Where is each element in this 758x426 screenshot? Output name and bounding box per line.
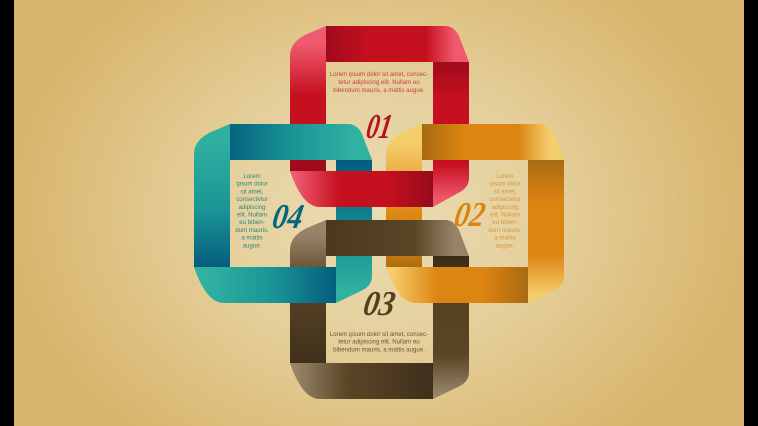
text block 01 bbox=[330, 71, 428, 94]
orange ring right column bbox=[528, 160, 564, 303]
teal ring bottom band bbox=[194, 267, 336, 303]
number 04: 04 bbox=[270, 197, 306, 236]
text block 02: dum mauris, bbox=[488, 227, 522, 234]
text block 01: tetur adipiscing elit. Nullam eu bbox=[338, 79, 420, 86]
text block 01: Lorem ipsum dolor sit amet, consec- bbox=[330, 71, 428, 78]
brown ring top band bbox=[326, 220, 469, 256]
number 03: 03 bbox=[361, 284, 398, 323]
text block 04: eu biben- bbox=[239, 219, 265, 226]
orange ring left column bbox=[386, 124, 422, 267]
text block 02: consectetur bbox=[489, 196, 521, 203]
number 01: 01 bbox=[364, 107, 395, 146]
brown ring bottom band bbox=[290, 363, 433, 399]
text block 03: bibendum mauris, a mattis augue. bbox=[333, 346, 425, 354]
text block 02: Lorem bbox=[496, 173, 514, 180]
number 02: 02 bbox=[452, 195, 488, 234]
text block 02: eu biben- bbox=[492, 219, 518, 226]
red ring left column bbox=[290, 26, 326, 171]
text block 02: adipiscing bbox=[491, 204, 519, 211]
orange ring bottom band bbox=[386, 267, 528, 303]
text block 03: tetur adipiscing elit. Nullam eu bbox=[338, 338, 420, 346]
orange ring top band bbox=[422, 124, 564, 160]
text block 03: Lorem ipsum dolor sit amet, consec- bbox=[330, 331, 428, 338]
brown ring left column bbox=[290, 220, 326, 363]
red ring bottom band bbox=[290, 171, 433, 207]
red ring top band bbox=[326, 26, 469, 62]
teal ring top band bbox=[230, 124, 372, 160]
brown ring right column bbox=[433, 256, 469, 399]
text block 01: bibendum mauris, a mattis augue. bbox=[333, 87, 425, 94]
text block 02: augue. bbox=[496, 242, 515, 249]
text block 04: ipsum dolor bbox=[236, 181, 268, 188]
text block 02: sit amet, bbox=[493, 188, 517, 195]
teal ring right column bbox=[336, 160, 372, 303]
red ring right column bbox=[433, 62, 469, 207]
text block 04 bbox=[235, 173, 269, 249]
text block 02 bbox=[488, 173, 522, 249]
text block 04: consectetur bbox=[236, 196, 268, 203]
text block 04: Lorem bbox=[243, 173, 261, 180]
text block 04: dum mauris, bbox=[235, 227, 269, 234]
text block 04: adipiscing bbox=[238, 204, 266, 211]
text block 02: a mattis bbox=[494, 235, 516, 242]
text block 04: a mattis bbox=[241, 235, 263, 242]
text block 04: sit amet, bbox=[240, 188, 264, 195]
text block 02: ipsum dolor bbox=[489, 181, 521, 188]
text block 04: elit. Nullam bbox=[237, 212, 267, 218]
teal ring left column bbox=[194, 124, 230, 267]
text block 03 bbox=[330, 331, 428, 354]
text block 04: augue. bbox=[243, 242, 262, 249]
text block 02: elit. Nullam bbox=[490, 212, 520, 218]
